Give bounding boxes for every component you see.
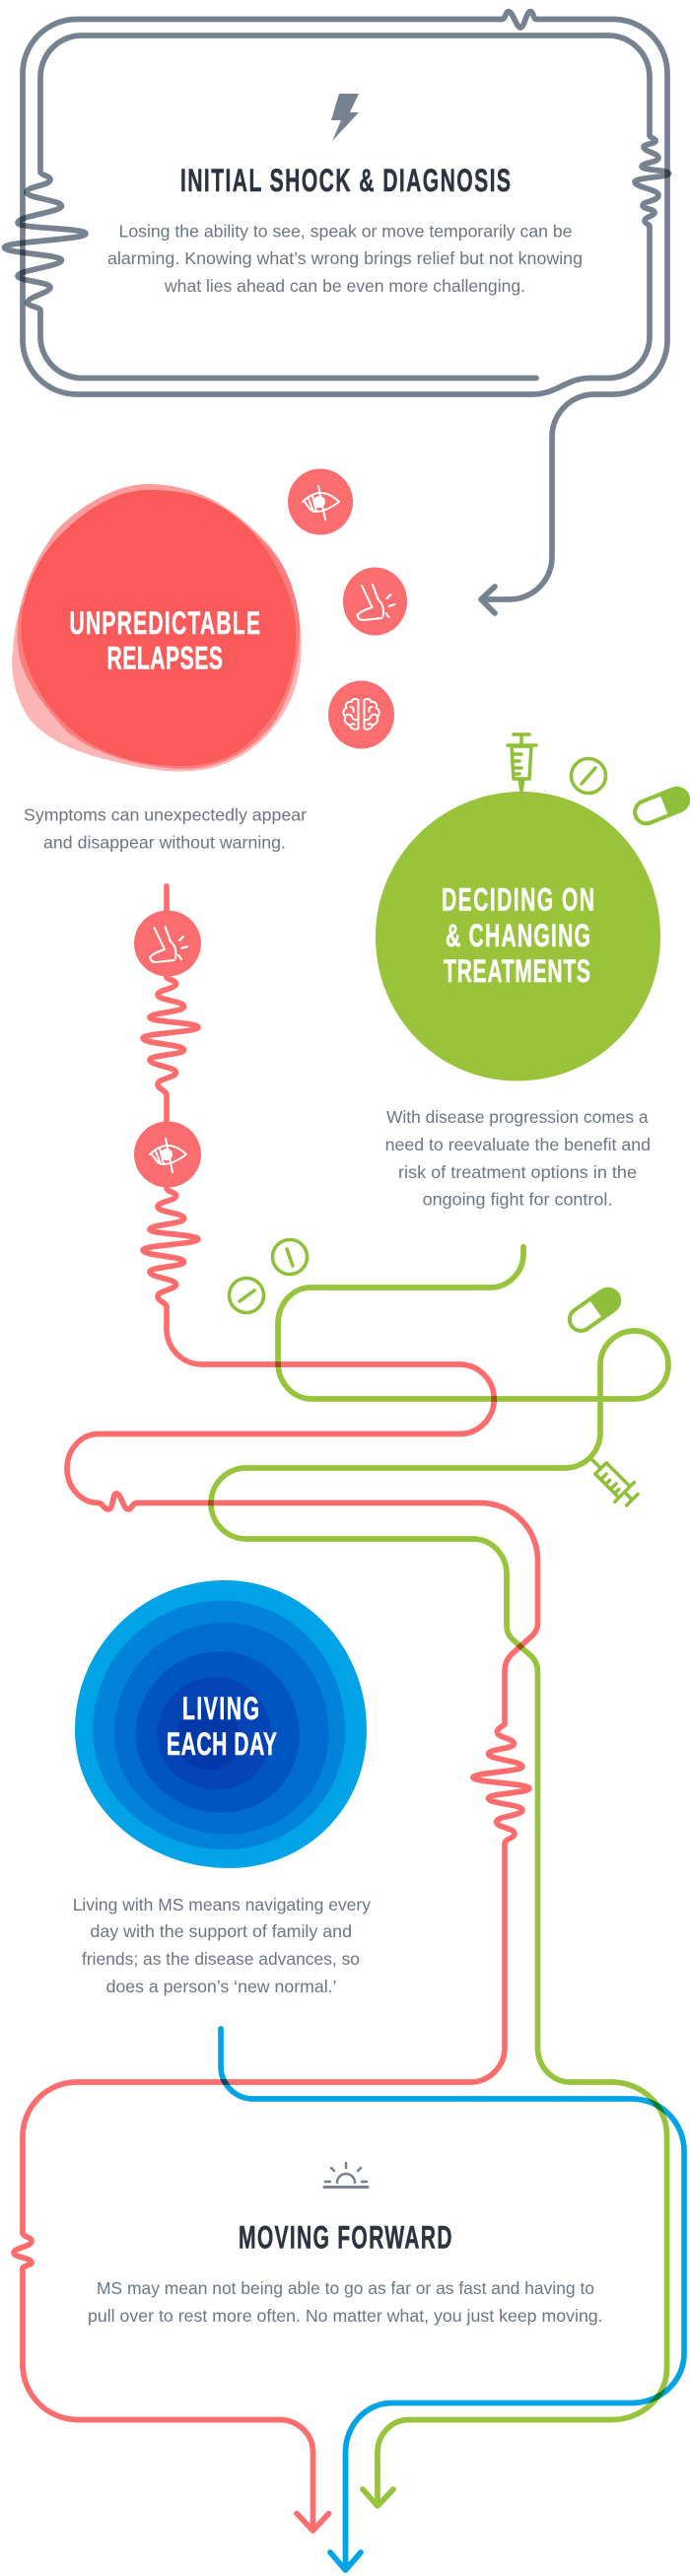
- text: relapses description: and disappear without warning.: [43, 833, 286, 853]
- icon: syringe on green line: [583, 1450, 642, 1509]
- icon: sunrise: [324, 2163, 368, 2187]
- text: living each day description: [73, 1895, 371, 1996]
- green journey line with loop and arrow: [211, 1247, 668, 2506]
- text: relapses description: Symptoms can unexpectedly appear: [24, 805, 307, 825]
- text: treatments description: risk of treatment options in the: [398, 1162, 637, 1182]
- heading: living each day: [167, 1690, 277, 1762]
- text: initial shock description: alarming. Knowing what’s wrong brings relief but not knowing: [107, 248, 583, 268]
- icon: foot symptom: [343, 568, 407, 635]
- heading: living each day: LIVING: [182, 1690, 259, 1726]
- text: relapses description: [24, 805, 307, 853]
- text: moving forward description: [88, 2278, 603, 2326]
- red blob: unpredictable relapses: [12, 484, 302, 771]
- green blob: deciding on treatments: [376, 792, 660, 1080]
- text: moving forward description: pull over to rest more often. No matter what, you just keep moving.: [88, 2306, 603, 2326]
- text: initial shock description: Losing the ability to see, speak or move temporarily can be: [118, 221, 572, 241]
- red journey line with squiggles and arrow: [14, 886, 538, 2531]
- heading: deciding on and changing treatments: TREATMENTS: [444, 952, 590, 989]
- text: treatments description: need to reevaluate the benefit and: [385, 1135, 651, 1154]
- icon: round pill left: [229, 1278, 264, 1313]
- blue concentric blob: living each day: [75, 1580, 367, 1868]
- text: treatments description: [385, 1107, 651, 1209]
- text: living each day description: does a person’s ‘new normal.’: [106, 1977, 336, 1996]
- heading: deciding on and changing treatments: & CHANGING: [446, 917, 590, 953]
- icon: capsule: [631, 783, 690, 829]
- heading: initial shock and diagnosis: INITIAL SHOCK & DIAGNOSIS: [180, 162, 511, 198]
- heading: deciding on and changing treatments: [442, 881, 594, 989]
- text: moving forward description: MS may mean not being able to go as far or as fast and having to: [97, 2278, 594, 2298]
- icon: round pill right: [272, 1240, 308, 1274]
- heading: unpredictable relapses: [69, 604, 260, 676]
- text: living each day description: friends; as the disease advances, so: [82, 1949, 360, 1969]
- icon: eye symptom: [288, 469, 353, 534]
- heading: unpredictable relapses: RELAPSES: [106, 640, 223, 676]
- text: living each day description: day with the support of family and: [91, 1921, 352, 1941]
- gray journey line: double frame with squiggles and arrow: [4, 12, 668, 613]
- blue journey line with arrow: [221, 2029, 684, 2570]
- text: initial shock description: what lies ahead can be even more challenging.: [164, 276, 525, 296]
- icon: capsule by loop: [564, 1282, 627, 1337]
- eye marker on red line: [134, 1122, 201, 1187]
- heading: unpredictable relapses: UNPREDICTABLE: [69, 604, 260, 641]
- text: initial shock description: [107, 221, 583, 296]
- icon: lightning bolt: [331, 94, 359, 141]
- text: treatments description: ongoing fight for control.: [423, 1189, 612, 1209]
- icon: brain symptom: [328, 680, 394, 749]
- foot marker on red line: [134, 911, 201, 976]
- text: living each day description: Living with MS means navigating every: [73, 1895, 371, 1915]
- icon: round pill: [572, 759, 605, 793]
- text: treatments description: With disease progression comes a: [386, 1107, 649, 1127]
- heading: living each day: EACH DAY: [167, 1725, 277, 1762]
- heading: moving forward: MOVING FORWARD: [239, 2219, 451, 2256]
- heading: deciding on and changing treatments: DECIDING ON: [442, 881, 594, 918]
- icon: syringe above green blob: [508, 734, 536, 792]
